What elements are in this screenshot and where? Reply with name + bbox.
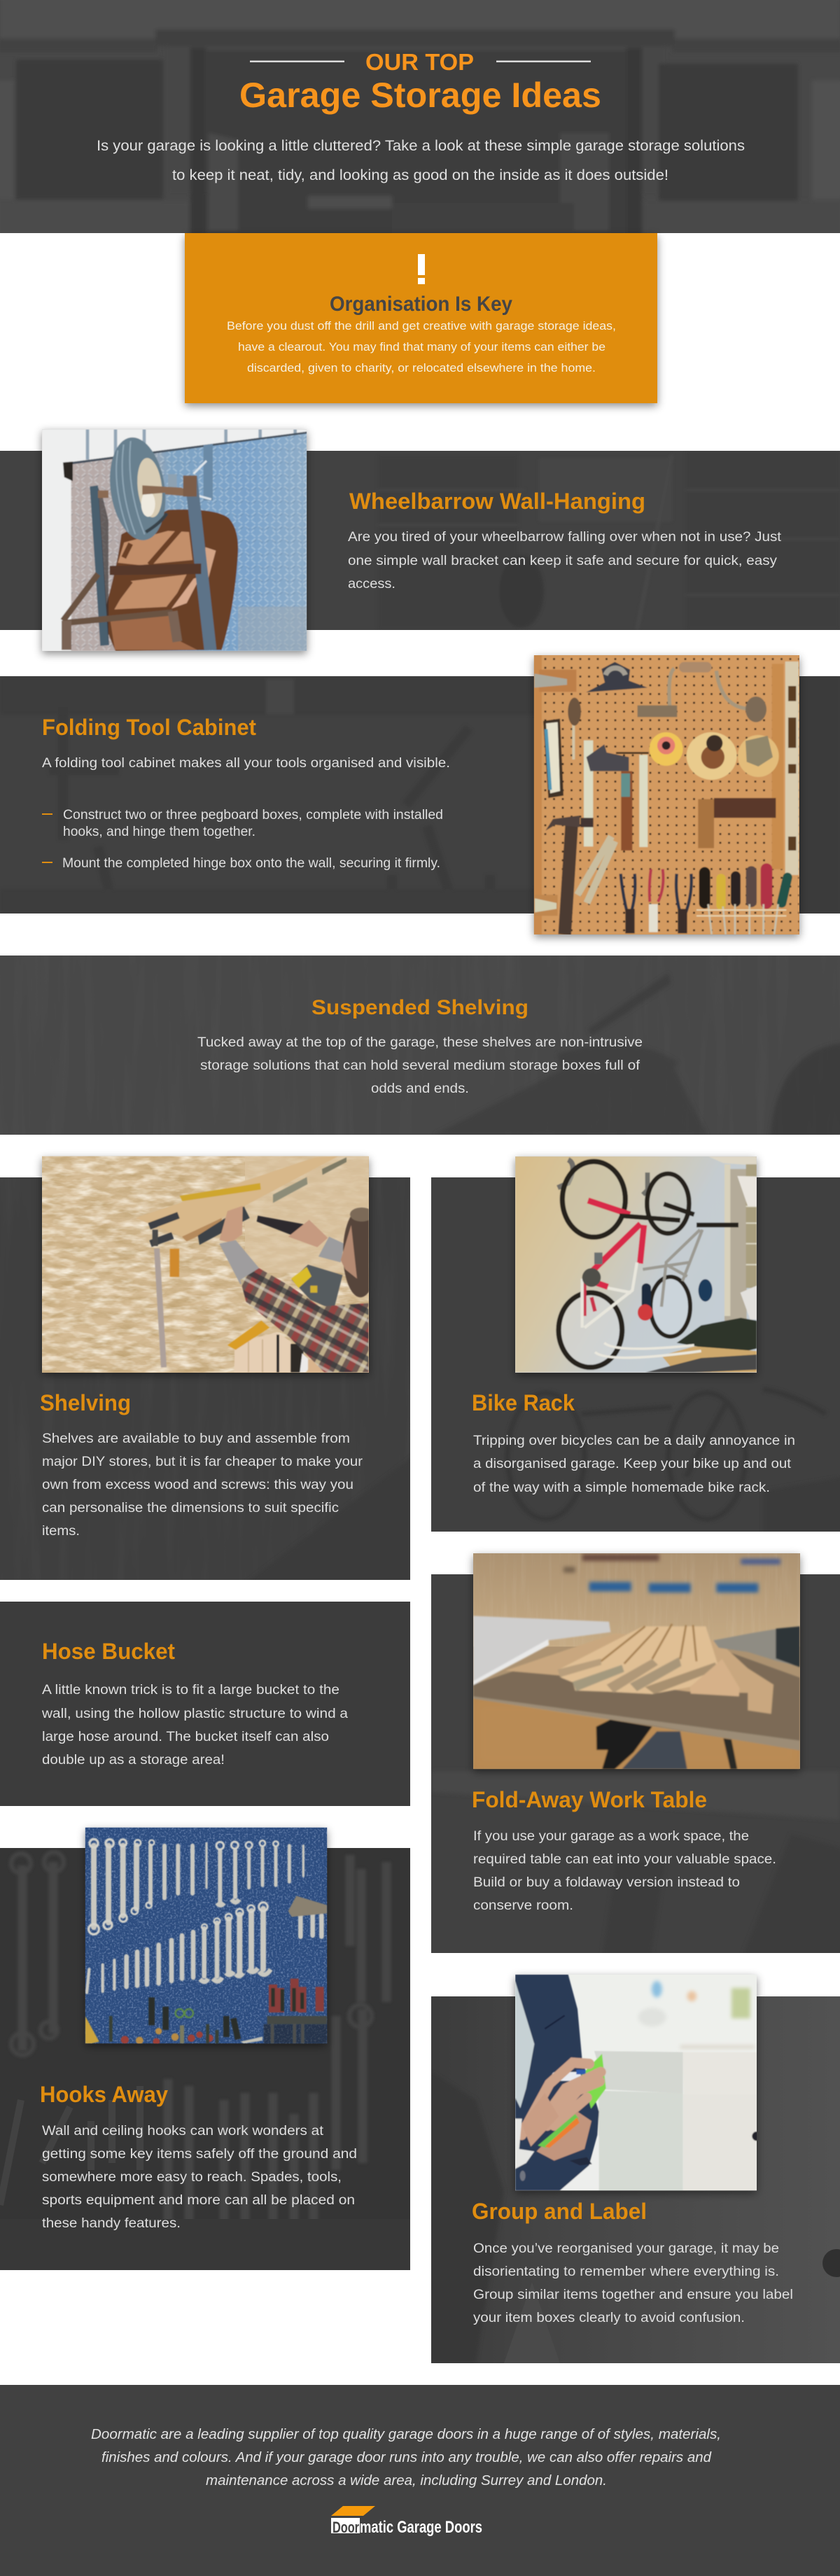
- heading: Shelving: [40, 1390, 131, 1415]
- bullet list: Construct two or three pegboard boxes, complete with installed: [63, 808, 443, 822]
- panel background: [431, 1177, 840, 1534]
- body text: double up as a storage area!: [42, 1753, 225, 1768]
- photo frame: work table: [473, 1553, 800, 1769]
- header panel: [0, 0, 840, 237]
- body text: Group similar items together and ensure you label: [473, 2288, 793, 2302]
- photo: bikes hanging on wall: [515, 1156, 757, 1373]
- body text: [41, 1683, 348, 1768]
- body text: somewhere more easy to reach. Spades, tools,: [42, 2170, 342, 2185]
- body text: one simple wall bracket can keep it safe and secure for quick, easy: [348, 554, 778, 568]
- footer text: finishes and colours. And if your garage door runs into any trouble, we can also offer repairs and: [102, 2450, 712, 2465]
- body text: [197, 1035, 643, 1096]
- panel: shelving: [0, 1156, 413, 1583]
- header background: garage photo: [0, 0, 840, 237]
- panel: bike rack: [431, 1156, 840, 1534]
- panel: fold-away work table: [431, 1553, 840, 1956]
- body text: [473, 2241, 793, 2325]
- body text: can personalise the dimensions to suit specific: [42, 1501, 339, 1516]
- body text: [42, 1432, 363, 1539]
- card text: Before you dust off the drill and get creative with garage storage ideas,: [227, 319, 616, 332]
- card text: discarded, given to charity, or relocated elsewhere in the home.: [247, 361, 596, 374]
- intro text: Is your garage is looking a little cluttered? Take a look at these simple garage storage solutions: [97, 138, 745, 154]
- panel: group and label: [431, 1975, 840, 2363]
- panel: hose bucket: [0, 1602, 410, 1806]
- bullet list: hooks, and hinge them together.: [63, 825, 255, 839]
- body text: disorientating to remember where everything is.: [473, 2264, 779, 2279]
- card heading: Organisation Is Key: [330, 293, 512, 316]
- footer text: maintenance across a wide area, including Surrey and London.: [206, 2473, 607, 2488]
- photo: wrenches on blue board: [85, 1828, 327, 2045]
- panel: wheelbarrow wall-hanging: [0, 429, 840, 651]
- photo: hand labelling a box: [515, 1975, 762, 2190]
- photo frame: wheelbarrow: [42, 429, 307, 651]
- icon: exclamation mark: [418, 254, 425, 284]
- heading: Hose Bucket: [42, 1639, 175, 1664]
- photo frame: bikes: [515, 1156, 757, 1373]
- body text: [348, 530, 782, 592]
- body text: [473, 1434, 795, 1495]
- body text: Tucked away at the top of the garage, these shelves are non-intrusive: [197, 1035, 643, 1050]
- body text: Build or buy a foldaway version instead to: [473, 1875, 740, 1890]
- body text: a disorganised garage. Keep your bike up and out: [473, 1457, 792, 1471]
- panel: organisation is key: [185, 233, 657, 403]
- panel background: [431, 1574, 840, 1956]
- body text: Tripping over bicycles can be a daily annoyance in: [473, 1434, 795, 1448]
- panel background: [0, 1177, 413, 1583]
- photo: pegboard with tools: [534, 655, 799, 934]
- photo: wheelbarrow on wall: [42, 429, 307, 651]
- body text: storage solutions that can hold several medium storage boxes full of: [200, 1058, 640, 1073]
- main title: Garage Storage Ideas: [239, 76, 601, 115]
- title rule right: [496, 60, 591, 62]
- photo frame: labelled box: [515, 1975, 757, 2190]
- footer text: [91, 2427, 721, 2488]
- logo: Doormatic Garage Doors: [331, 2506, 482, 2537]
- body text: your item boxes clearly to avoid confusion.: [473, 2311, 745, 2325]
- intro text: [97, 138, 745, 183]
- card background: [185, 233, 657, 403]
- bullet list: [42, 808, 443, 871]
- photo frame: pegboard: [534, 655, 799, 934]
- photo frame: wrenches: [85, 1828, 327, 2043]
- body text: large hose around. The bucket itself can also: [42, 1730, 329, 1744]
- body text: A little known trick is to fit a large bucket to the: [42, 1683, 340, 1698]
- panel background: [0, 676, 840, 913]
- logo: Doormatic Garage Doors: Door: [332, 2519, 359, 2536]
- title rule left: [250, 60, 344, 62]
- body text: required table can eat into your valuable space.: [473, 1852, 776, 1867]
- body text: [42, 2124, 357, 2231]
- panel: footer: [0, 2385, 840, 2576]
- body text: these handy features.: [42, 2216, 181, 2231]
- heading: Bike Rack: [472, 1390, 575, 1415]
- heading: Fold-Away Work Table: [472, 1787, 707, 1812]
- body text: items.: [42, 1524, 80, 1539]
- heading: Group and Label: [472, 2199, 647, 2224]
- heading: Hooks Away: [40, 2082, 168, 2107]
- body text: conserve room.: [473, 1898, 573, 1913]
- photo: wood on work table: [473, 1553, 800, 1769]
- panel: suspended shelving: [0, 955, 840, 1138]
- heading: Suspended Shelving: [312, 996, 528, 1019]
- body text: of the way with a simple homemade bike rack.: [473, 1480, 770, 1495]
- panel background: [431, 1996, 840, 2363]
- intro text: to keep it neat, tidy, and looking as good on the inside as it does outside!: [172, 167, 668, 183]
- body text: wall, using the hollow plastic structure to wind a: [41, 1707, 348, 1721]
- body text: Shelves are available to buy and assemble from: [42, 1432, 350, 1446]
- panel: hooks away: [0, 1828, 410, 2270]
- body text: [473, 1829, 776, 1913]
- panel background: [0, 1848, 410, 2270]
- body text: access.: [348, 577, 396, 592]
- bullet list: Mount the completed hinge box onto the wall, securing it firmly.: [62, 856, 440, 871]
- body text: Wall and ceiling hooks can work wonders at: [42, 2124, 324, 2138]
- card text: have a clearout. You may find that many of your items can either be: [238, 340, 606, 354]
- photo frame: shelving: [42, 1156, 369, 1373]
- body text: Once you’ve reorganised your garage, it may be: [473, 2241, 779, 2256]
- logo: Doormatic Garage Doors: matic Garage Doors: [360, 2518, 482, 2537]
- body text: Are you tired of your wheelbarrow falling over when not in use? Just: [348, 530, 782, 545]
- card text: [227, 319, 616, 374]
- body text: major DIY stores, but it is far cheaper to make your: [42, 1455, 363, 1469]
- body text: own from excess wood and screws: this way you: [42, 1478, 354, 1492]
- panel background: [0, 451, 840, 630]
- panel background: [0, 955, 840, 1138]
- body text: getting some key items safely off the ground and: [42, 2147, 357, 2162]
- footer text: Doormatic are a leading supplier of top quality garage doors in a huge range of of styles, materials,: [91, 2427, 721, 2442]
- body text: sports equipment and more can all be placed on: [42, 2193, 355, 2208]
- heading: Folding Tool Cabinet: [42, 715, 256, 740]
- body text: odds and ends.: [371, 1082, 469, 1096]
- heading: Wheelbarrow Wall-Hanging: [349, 489, 645, 514]
- body text: If you use your garage as a work space, the: [473, 1829, 749, 1844]
- panel: folding tool cabinet: [0, 655, 840, 934]
- title kicker: OUR TOP: [365, 49, 474, 75]
- panel background: [0, 1602, 410, 1806]
- intro sentence: A folding tool cabinet makes all your tools organised and visible.: [42, 756, 450, 771]
- photo: man fitting shelf: [42, 1156, 378, 1373]
- footer background: [0, 2385, 840, 2576]
